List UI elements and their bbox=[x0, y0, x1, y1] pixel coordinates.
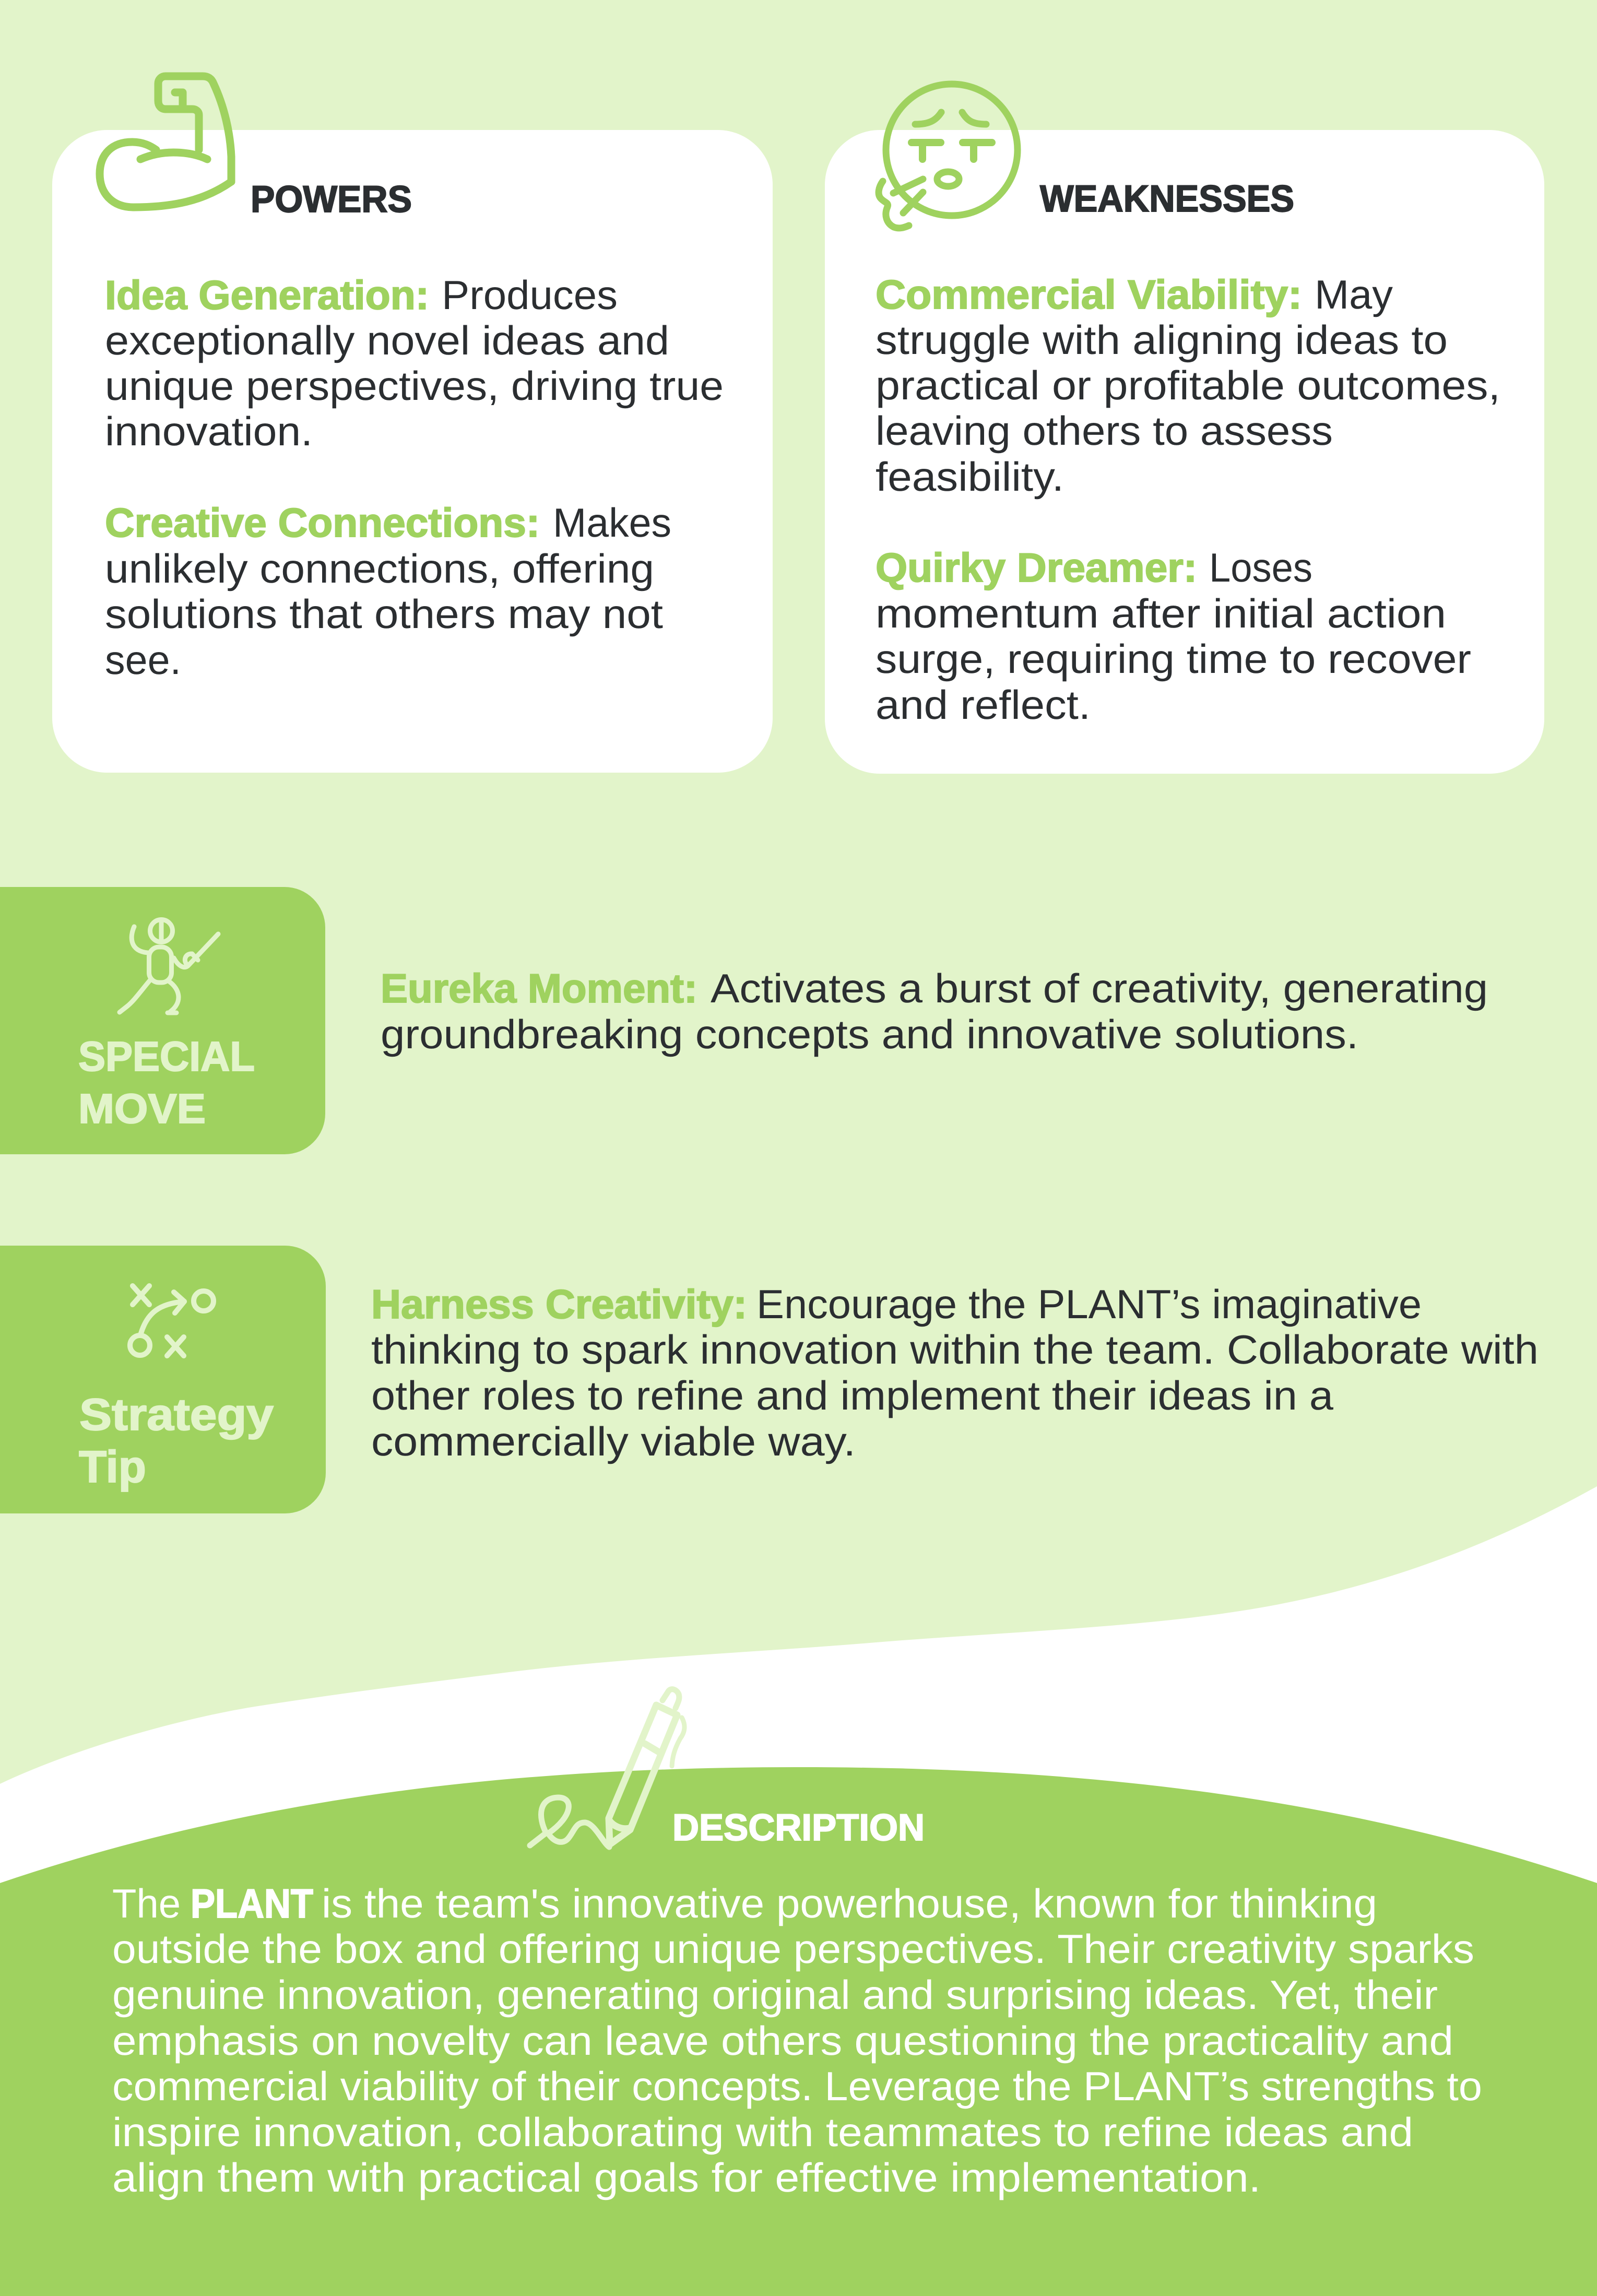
icon: pen signature bbox=[530, 1689, 684, 1847]
powers card bbox=[52, 130, 773, 773]
commercial viability text: struggle with aligning ideas to bbox=[876, 317, 1448, 363]
creative connections text: see. bbox=[105, 637, 181, 683]
quirky dreamer text: Quirky Dreamer: bbox=[876, 545, 1197, 590]
quirky dreamer text: momentum after initial action bbox=[876, 590, 1446, 636]
description body text: inspire innovation, collaborating with teammates to refine ideas and bbox=[112, 2109, 1413, 2155]
special move description: groundbreaking concepts and innovative solutions. bbox=[381, 1011, 1358, 1057]
commercial viability text: Commercial Viability: bbox=[876, 271, 1302, 317]
quirky dreamer text: and reflect. bbox=[876, 682, 1091, 728]
description body text: genuine innovation, generating original and surprising ideas. Yet, their bbox=[112, 1972, 1438, 2018]
description body text: The bbox=[112, 1880, 181, 1926]
icon: flexed arm bbox=[100, 76, 231, 207]
quirky dreamer text: surge, requiring time to recover bbox=[876, 636, 1471, 682]
strategy tip description: thinking to spark innovation within the team. Collaborate with bbox=[371, 1327, 1539, 1372]
icon: fencer bbox=[120, 920, 218, 1013]
strategy tip label: Tip bbox=[79, 1442, 146, 1492]
idea generation text: exceptionally novel ideas and bbox=[105, 317, 669, 363]
creative connections text bbox=[105, 500, 671, 683]
quirky dreamer text bbox=[876, 545, 1471, 728]
idea generation text bbox=[105, 272, 724, 454]
commercial viability text: feasibility. bbox=[876, 454, 1064, 500]
idea generation text: Idea Generation: bbox=[105, 272, 429, 318]
strategy tip description: Harness Creativity: bbox=[371, 1281, 747, 1327]
idea generation text: innovation. bbox=[105, 408, 313, 454]
description body text: emphasis on novelty can leave others questioning the practicality and bbox=[112, 2018, 1453, 2064]
special move description: Eureka Moment: bbox=[381, 965, 697, 1011]
creative connections text: Makes bbox=[553, 500, 671, 546]
panel: powers bbox=[52, 76, 773, 773]
powers heading: POWERS bbox=[251, 179, 412, 220]
idea generation text: Produces bbox=[442, 272, 618, 318]
description body text: is the team's innovative powerhouse, known for thinking bbox=[322, 1880, 1377, 1926]
strategy tip description bbox=[371, 1281, 1539, 1464]
description heading: DESCRIPTION bbox=[672, 1807, 925, 1849]
description body text: commercial viability of their concepts. Leverage the PLANT’s strengths to bbox=[112, 2063, 1482, 2109]
icon: sick face with thermometer bbox=[879, 84, 1018, 228]
special move description bbox=[381, 965, 1488, 1057]
description body text: align them with practical goals for effective implementation. bbox=[112, 2155, 1261, 2200]
special move description: Activates a burst of creativity, generating bbox=[711, 965, 1488, 1011]
creative connections text: solutions that others may not bbox=[105, 591, 663, 637]
icon: play diagram bbox=[130, 1286, 214, 1356]
commercial viability text bbox=[876, 271, 1500, 500]
strategy tip description: other roles to refine and implement their ideas in a bbox=[371, 1372, 1334, 1418]
idea generation text: unique perspectives, driving true bbox=[105, 363, 724, 409]
strategy tip description: commercially viable way. bbox=[371, 1418, 856, 1464]
description body text: PLANT bbox=[191, 1880, 313, 1926]
quirky dreamer text: Loses bbox=[1209, 545, 1312, 590]
strategy tip label: Strategy bbox=[79, 1390, 274, 1440]
creative connections text: unlikely connections, offering bbox=[105, 546, 654, 591]
commercial viability text: May bbox=[1315, 271, 1393, 317]
creative connections text: Creative Connections: bbox=[105, 500, 540, 546]
dark green description background bbox=[0, 1767, 1597, 2296]
panel: special move bbox=[0, 887, 325, 1154]
description body text bbox=[112, 1880, 1482, 2200]
panel: weaknesses bbox=[825, 84, 1544, 774]
special move label: MOVE bbox=[78, 1085, 206, 1132]
weaknesses heading: WEAKNESSES bbox=[1040, 178, 1294, 220]
light green background with wavy lower edge bbox=[0, 0, 1597, 1784]
weaknesses card bbox=[825, 130, 1544, 774]
special move tab bbox=[0, 887, 325, 1154]
strategy tip description: Encourage the PLANT’s imaginative bbox=[756, 1281, 1422, 1327]
panel: description bbox=[112, 1689, 1482, 2200]
description body text: outside the box and offering unique perspectives. Their creativity sparks bbox=[112, 1926, 1474, 1972]
special move label: SPECIAL bbox=[78, 1033, 255, 1080]
strategy tip tab bbox=[0, 1246, 326, 1513]
panel: strategy tip bbox=[0, 1246, 326, 1513]
commercial viability text: leaving others to assess bbox=[876, 408, 1333, 454]
commercial viability text: practical or profitable outcomes, bbox=[876, 362, 1500, 408]
strategy tip label bbox=[79, 1390, 274, 1492]
special move label bbox=[78, 1033, 255, 1132]
